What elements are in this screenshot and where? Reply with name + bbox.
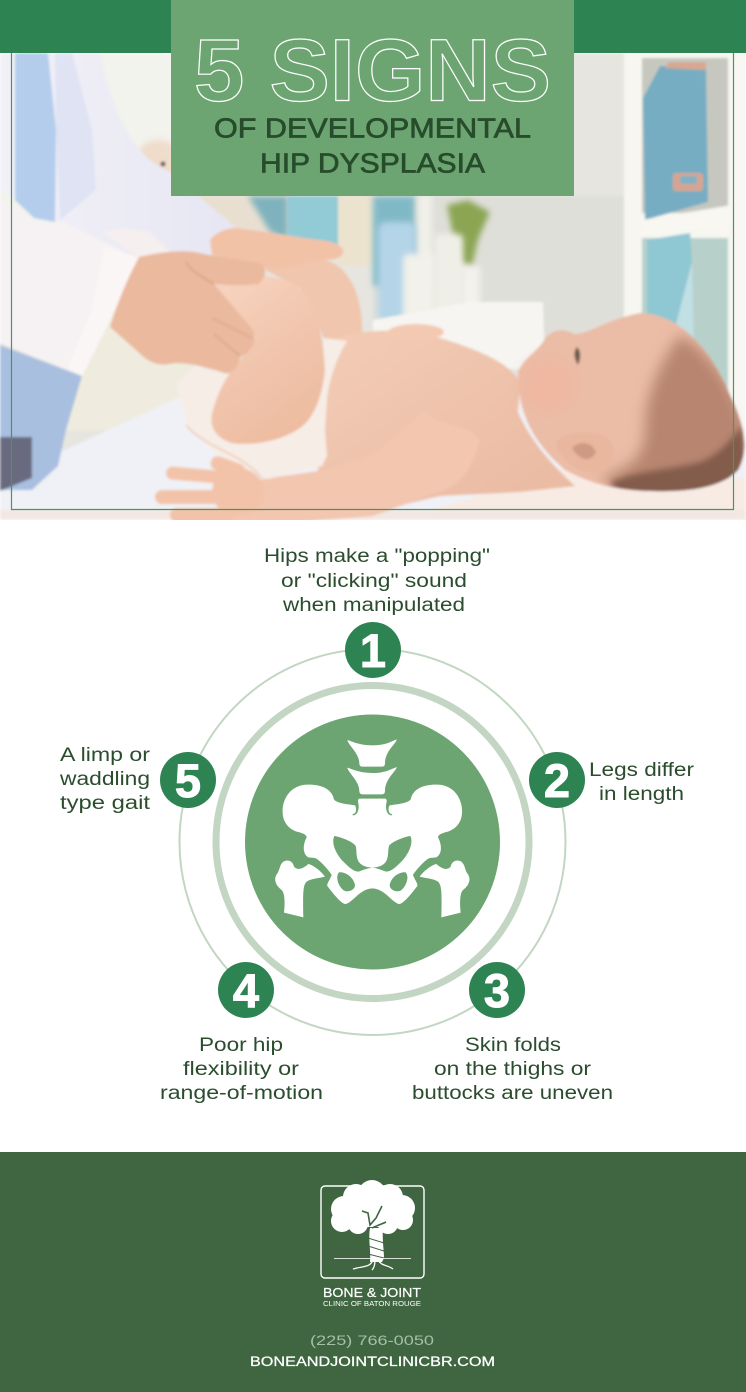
central green circle (245, 714, 500, 970)
logo wordmark: BONE & JOINT (323, 1285, 421, 1300)
sign 5 text: A limp or (60, 745, 151, 766)
diaper (177, 338, 347, 479)
sign 4 text: flexibility or (183, 1059, 300, 1080)
sign 2 text (589, 760, 695, 805)
coat and shirt (0, 53, 235, 258)
phone number: (225) 766-0050 (310, 1332, 434, 1348)
sign 1 text: Hips make a "popping" (264, 546, 490, 567)
icon: pelvis and hip bones (275, 739, 469, 917)
eye (574, 347, 580, 365)
head (518, 313, 744, 491)
subtitle (214, 112, 531, 178)
shelving (624, 53, 733, 400)
ear (556, 433, 613, 472)
badge 3 (469, 962, 525, 1018)
cheek (522, 359, 574, 411)
hair (600, 335, 746, 500)
teddy behind coat (139, 138, 171, 174)
badge 4: 4 (233, 964, 259, 1017)
badge 2 (529, 752, 585, 808)
logo: Bone & Joint tree (321, 1180, 424, 1308)
thin photo frame (12, 53, 734, 510)
photo: doctor examining a baby's hips (0, 53, 746, 522)
inner thick ring (216, 686, 529, 998)
badge 3: 3 (484, 964, 510, 1017)
badge 1: 1 (360, 624, 386, 677)
front thigh (211, 276, 325, 444)
tree trunk (369, 1228, 384, 1262)
sign 1 text: or "clicking" sound (281, 571, 467, 592)
title panel (171, 0, 574, 196)
sign 3 text: buttocks are uneven (412, 1083, 613, 1104)
sign 1 text: when manipulated (282, 595, 465, 616)
back thigh (265, 259, 362, 340)
sign 5 text: waddling (59, 769, 150, 790)
upper hand (210, 228, 343, 270)
bed sheet (0, 398, 746, 510)
arm and baby's hand (231, 470, 400, 520)
sign 2 text: in length (599, 784, 684, 805)
title: 5 SIGNS: 5 SIGNS (194, 20, 551, 120)
sign 4 text (160, 1035, 323, 1104)
sign 5 text (59, 745, 151, 814)
sign 3 text (412, 1035, 613, 1104)
badge 2: 2 (544, 754, 570, 807)
outer thin ring (180, 649, 566, 1035)
spine branches (362, 1206, 386, 1228)
subtitle: OF DEVELOPMENTAL (214, 112, 531, 144)
top green bar (0, 0, 746, 53)
logo wordmark (323, 1285, 421, 1308)
sign 5 text: type gait (60, 793, 151, 814)
logo wordmark: CLINIC OF BATON ROUGE (323, 1301, 421, 1308)
sign 4 text: range-of-motion (160, 1083, 323, 1104)
badge 5: 5 (175, 754, 201, 807)
sign 2 text: Legs differ (589, 760, 695, 781)
sign 1 text (264, 546, 490, 616)
sign 4 text: Poor hip (199, 1035, 283, 1056)
badge 1 (345, 622, 401, 678)
footer band (0, 1152, 746, 1392)
subtitle: HIP DYSPLASIA (260, 148, 485, 178)
badge 4 (218, 962, 274, 1018)
sign 3 text: on the thighs or (434, 1059, 592, 1080)
sign 3 text: Skin folds (465, 1035, 561, 1056)
lower hand (110, 251, 265, 373)
tree canopy (331, 1180, 415, 1234)
torso (316, 330, 575, 504)
baby's fingers (155, 454, 264, 522)
boxes, bottles and plant (248, 196, 288, 240)
website: BONEANDJOINTCLINICBR.COM (250, 1354, 495, 1369)
badge 5 (160, 752, 216, 808)
